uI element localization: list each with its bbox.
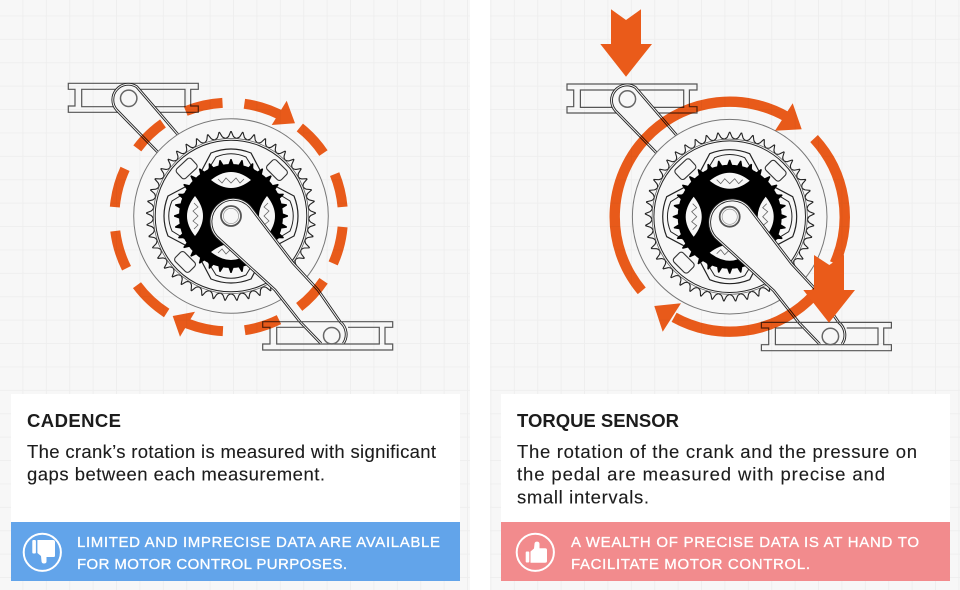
description: cadence — [27, 441, 436, 484]
description: torque sensor: The rotation of the crank and the pressure on — [517, 441, 917, 462]
description: torque sensor: the pedal are measured with precise and — [517, 464, 885, 484]
panel: cadence — [0, 0, 470, 590]
text card: cadence — [11, 394, 460, 581]
callout text: limited data: FOR MOTOR CONTROL PURPOSES. — [77, 556, 347, 573]
callout text: wealth of data: A WEALTH OF PRECISE DATA IS AT HAND TO — [571, 534, 919, 551]
callout: wealth of data — [501, 522, 950, 581]
icon: thumbs up — [517, 534, 554, 571]
crankset illustration: cadence — [68, 83, 393, 350]
arrow: pressure on top pedal — [600, 9, 652, 77]
arrow: pressure on bottom pedal — [803, 255, 855, 323]
heading: torque sensor: TORQUE SENSOR — [517, 410, 679, 431]
continuous rotation ring — [567, 54, 892, 379]
description: torque sensor: small intervals. — [517, 486, 649, 508]
dashed rotation ring with gaps — [100, 88, 358, 346]
description: cadence: gaps between each measurement. — [27, 464, 325, 484]
description: torque sensor — [517, 441, 917, 508]
callout text: wealth of data — [571, 534, 919, 573]
crankset illustration: torque sensor — [567, 84, 891, 351]
panel: torque sensor — [490, 0, 960, 590]
callout text: limited data — [77, 534, 440, 573]
callout text: wealth of data: FACILITATE MOTOR CONTROL. — [571, 556, 810, 573]
heading: cadence: CADENCE — [27, 410, 121, 431]
text card: torque sensor — [501, 394, 950, 581]
icon: thumbs down — [24, 534, 61, 571]
callout text: limited data: LIMITED AND IMPRECISE DATA ARE AVAILABLE — [77, 534, 440, 551]
callout: limited data — [11, 522, 460, 581]
description: cadence: The crank’s rotation is measured with significant — [27, 441, 436, 462]
